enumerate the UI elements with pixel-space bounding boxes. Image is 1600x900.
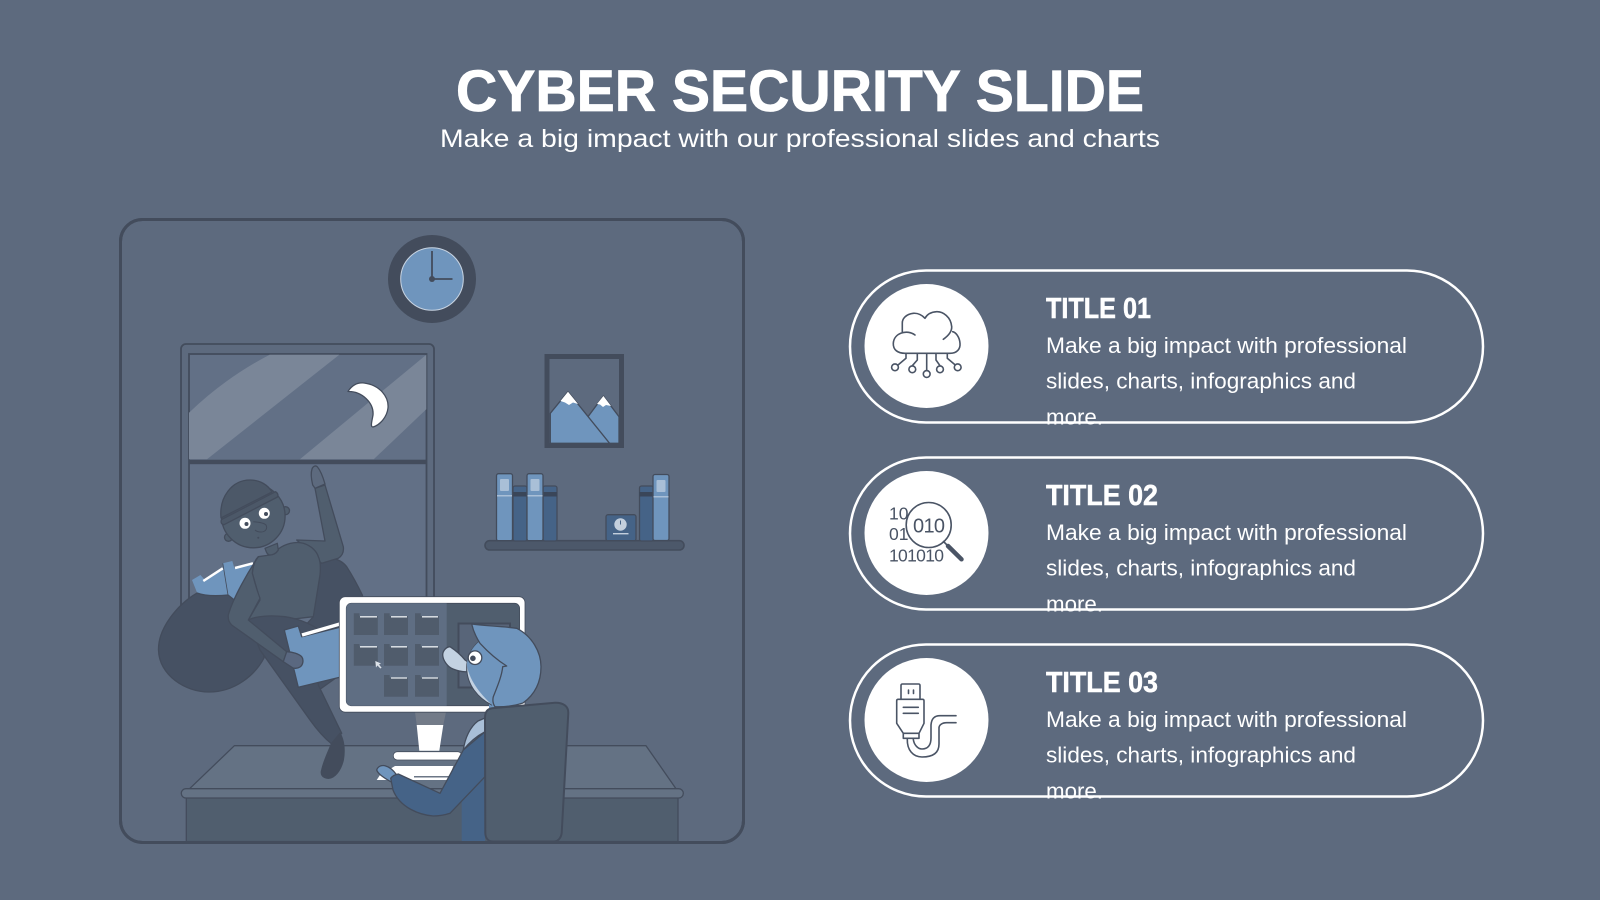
- back leg: [292, 558, 375, 690]
- text: description 02: Make a big impact with professional: [1046, 520, 1407, 545]
- text: description 01: [1046, 333, 1407, 430]
- text: description 03: more.: [1046, 778, 1103, 804]
- front leg: [248, 616, 342, 744]
- raised hand: [311, 466, 325, 488]
- face: [467, 642, 506, 705]
- text: description 01: Make a big impact with professional: [1046, 333, 1407, 358]
- title: CYBER SECURITY SLIDE: [456, 59, 1144, 124]
- text: description 03: [1046, 707, 1407, 804]
- desk: [181, 746, 683, 842]
- shirt: [463, 718, 485, 750]
- panel: item 01: [850, 270, 1483, 430]
- text: description 02: more.: [1046, 592, 1103, 616]
- chair: [485, 703, 568, 842]
- heading: title 02: TITLE 02: [1046, 480, 1158, 512]
- icon: binary magnifier: 10: [889, 504, 909, 524]
- foot: [321, 733, 344, 778]
- text: description 03: Make a big impact with professional: [1046, 707, 1407, 732]
- hand: [377, 765, 397, 782]
- loot bag: [158, 561, 264, 692]
- text: description 02: slides, charts, infographics and: [1046, 556, 1356, 580]
- arm: [391, 732, 485, 816]
- keyboard: [377, 766, 453, 780]
- office worker: [377, 624, 568, 842]
- neck: [265, 543, 278, 555]
- monitor: [339, 597, 525, 760]
- subtitle: Make a big impact with our professional slides and charts: [440, 125, 1160, 153]
- heading: title 01: TITLE 01: [1046, 293, 1151, 325]
- head: [221, 480, 290, 548]
- icon: binary magnifier: 010: [913, 516, 945, 538]
- hair: [472, 624, 541, 707]
- cursor: [375, 661, 382, 668]
- icon: cloud network: [864, 284, 988, 408]
- jacket: [462, 732, 485, 842]
- panel: item 02: [850, 458, 1483, 616]
- neck: [489, 703, 501, 712]
- window: [181, 344, 434, 624]
- holding arm: [228, 557, 287, 662]
- nose: [443, 647, 468, 672]
- stolen folder: [284, 622, 345, 687]
- thief: [158, 466, 375, 778]
- picture frame: [547, 356, 622, 446]
- torso: [248, 543, 320, 620]
- raised arm: [297, 485, 343, 563]
- bookshelf: [485, 474, 684, 550]
- text: description 01: slides, charts, infographics and: [1046, 368, 1356, 394]
- panel: item 03: [850, 644, 1483, 804]
- icon: binary magnifier: [864, 471, 988, 595]
- icon: binary magnifier: 01: [889, 524, 908, 544]
- text: description 02: [1046, 520, 1407, 616]
- panel: office illustration: [120, 220, 744, 842]
- icon: binary magnifier: 101010: [889, 546, 944, 566]
- icon: moon: [348, 383, 388, 427]
- icon: wall clock: [388, 235, 476, 323]
- text: description 03: slides, charts, infographics and: [1046, 742, 1356, 768]
- eye: [468, 651, 482, 664]
- icon: usb cable: [864, 658, 988, 782]
- holding hand: [283, 652, 303, 668]
- text: description 01: more.: [1046, 404, 1103, 430]
- heading: title 03: TITLE 03: [1046, 667, 1158, 699]
- desktop folders: [354, 613, 439, 697]
